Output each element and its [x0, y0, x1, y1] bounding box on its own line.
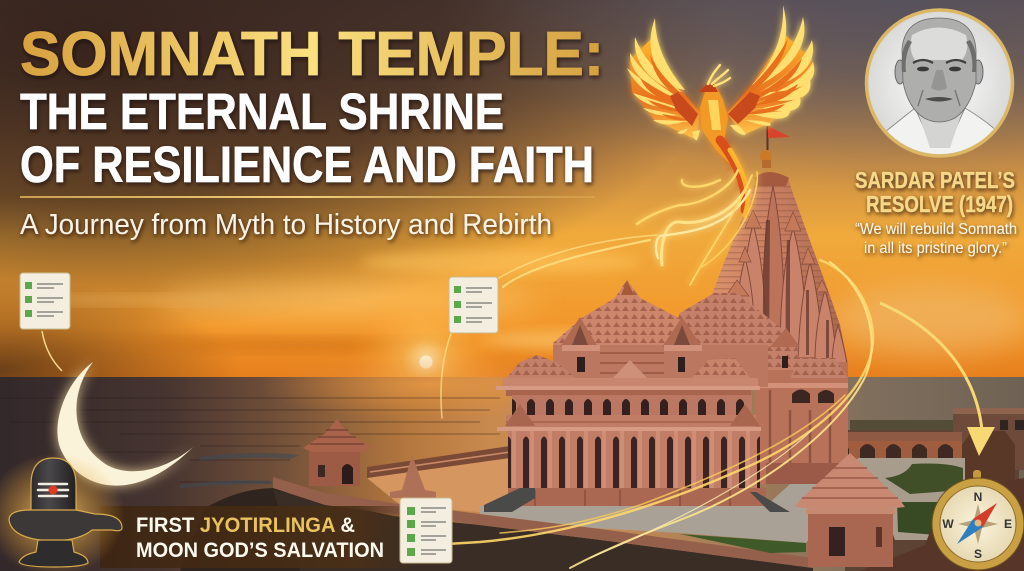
lawn: [680, 534, 806, 553]
title line 1: SOMNATH TEMPLE:: [20, 20, 604, 89]
title block: [20, 20, 604, 193]
tail plumes: [637, 140, 757, 285]
temple steps: [484, 488, 790, 512]
rear hall cornice: [758, 383, 848, 388]
rear hall arches: [792, 390, 834, 403]
temple: [480, 120, 905, 567]
icon: compass: N: [974, 490, 982, 504]
phoenix: [627, 5, 814, 285]
Sardar Patel heading: [855, 167, 1015, 217]
upper block with gables and windows: [553, 317, 800, 387]
crescent moon: [57, 362, 193, 486]
front-right shrine: [795, 453, 905, 567]
stone terrace: [480, 484, 850, 543]
caption line 1: FIRST JYOTIRLINGA &: [136, 514, 355, 537]
title line 2: THE ETERNAL SHRINE: [20, 83, 504, 140]
icon: compass: S: [974, 547, 982, 561]
rear hall: [755, 362, 848, 484]
Sardar Patel quote: in all its pristine glory.”: [864, 240, 1007, 257]
rear pyramid roof: [660, 293, 848, 378]
small spire shrine: [390, 455, 436, 498]
checklist icon: center: [449, 277, 498, 333]
rear hall ribs: [770, 390, 830, 480]
ground colonnade: [508, 431, 760, 493]
Sardar Patel quote: “We will rebuild Somnath: [855, 221, 1017, 238]
main shikhara spire: [713, 172, 848, 365]
front pyramid roof: [553, 280, 700, 372]
front lower roofs: [505, 355, 752, 380]
icon: shivalinga: [0, 453, 125, 571]
shawl and kurta: [886, 108, 994, 154]
body and head: [699, 65, 734, 168]
icon: compass: W: [942, 517, 954, 531]
checklist icon: top left: [20, 273, 70, 329]
divider rule: [20, 196, 595, 198]
upper gallery: [496, 378, 761, 431]
title line 3: OF RESILIENCE AND FAITH: [20, 136, 594, 193]
arrow to compass: [880, 303, 995, 456]
checklist icon: bottom: [400, 498, 452, 563]
background: sea: [0, 349, 1024, 571]
left wing: [627, 18, 700, 140]
left seaside shrine: [303, 419, 372, 486]
icon: compass: [932, 470, 1024, 570]
eyes and brows: [913, 60, 966, 63]
caption banner: [100, 506, 420, 568]
temple plinth: [508, 463, 847, 510]
golden swirl ribbons: [430, 235, 873, 568]
face: [902, 18, 976, 122]
subtitle: A Journey from Myth to History and Rebirth: [20, 209, 552, 241]
portrait: Sardar Patel: [866, 10, 1012, 160]
caption line 2: MOON GOD’S SALVATION: [136, 539, 384, 562]
right wing: [727, 5, 814, 135]
icon: compass: E: [1004, 517, 1012, 531]
right-side courtyard and distant buildings: [820, 408, 1024, 571]
left shoreline, wall and water: [180, 446, 813, 571]
Sardar Patel quote: [855, 221, 1017, 257]
nose and mouth: [931, 70, 947, 90]
connector from checklist to moon: [42, 331, 62, 371]
ears: [894, 60, 903, 84]
flag and finial: [760, 120, 790, 168]
